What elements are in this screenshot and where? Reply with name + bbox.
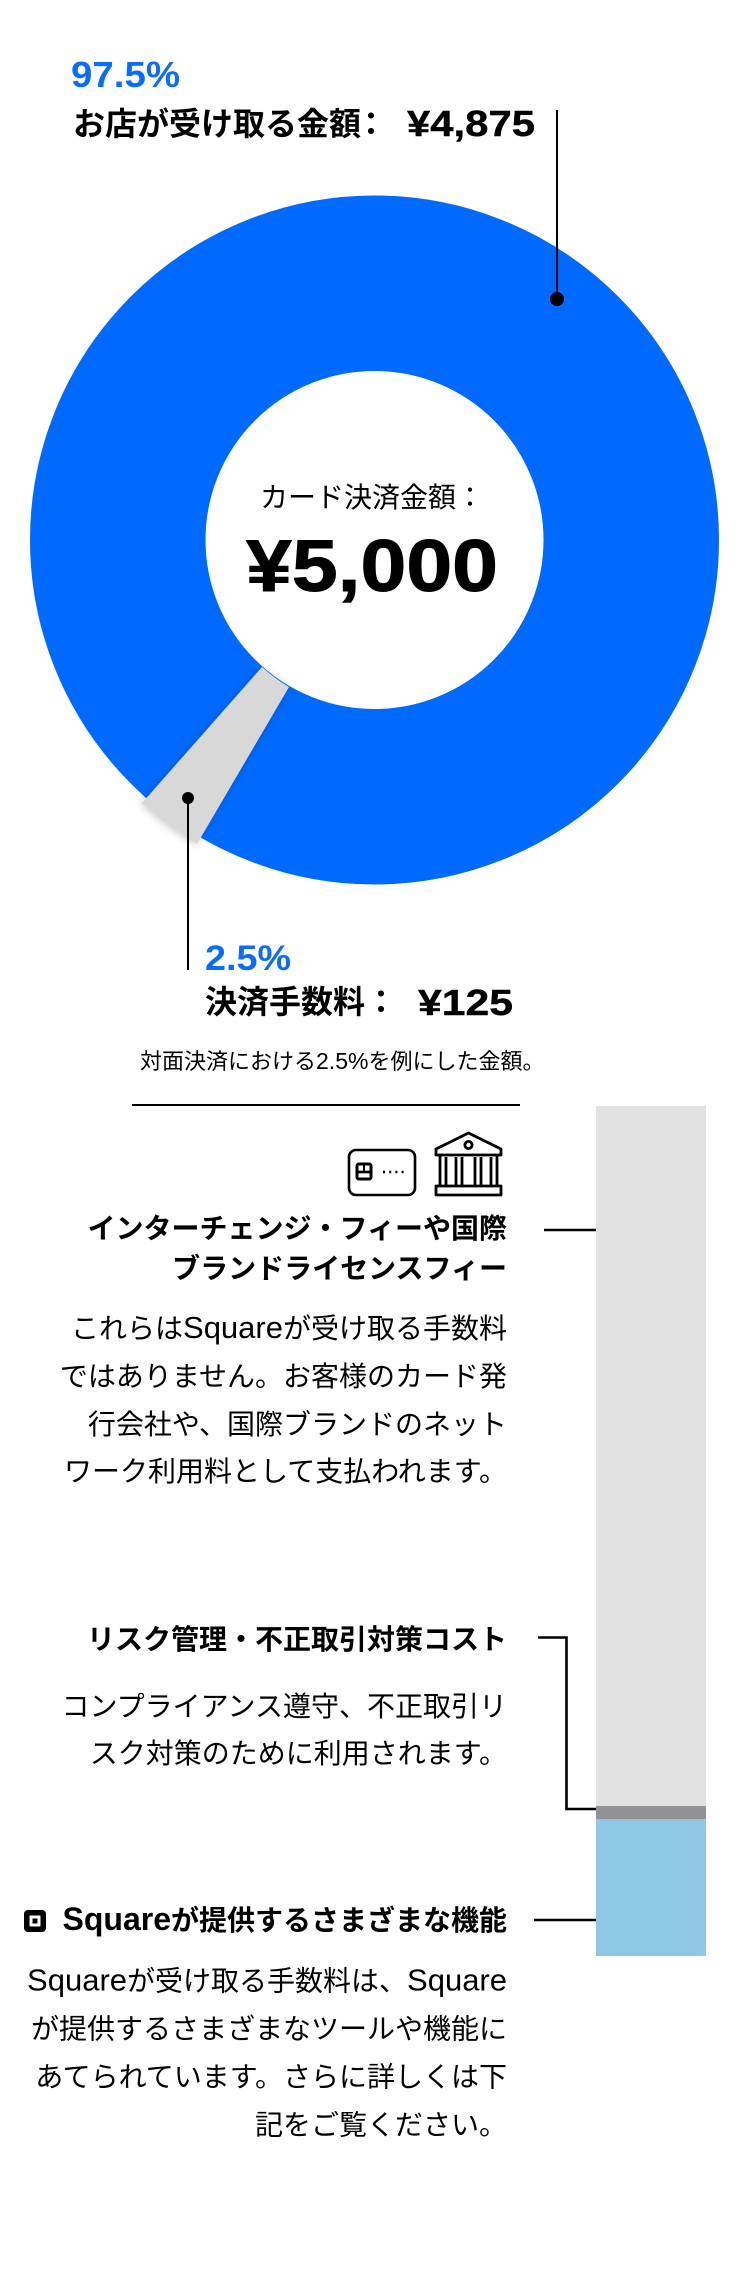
connector: risk bbox=[538, 1638, 596, 1809]
section: risk management: スク対策のために利用されます。 bbox=[90, 1738, 507, 1769]
leader line: fee bbox=[182, 792, 194, 970]
center total: カード決済金額： bbox=[260, 482, 484, 513]
label: fee amount: 決済手数料： bbox=[205, 984, 397, 1020]
donut chart bbox=[118, 283, 631, 844]
section: Square features: 記をご覧ください。 bbox=[255, 2110, 507, 2140]
section: risk management bbox=[62, 1624, 507, 1769]
section: interchange fee: ではありません。お客様のカード発 bbox=[60, 1361, 507, 1392]
section: interchange fee: インターチェンジ・フィーや国際 bbox=[88, 1213, 507, 1244]
section: risk management: コンプライアンス遵守、不正取引リ bbox=[62, 1691, 507, 1722]
section: interchange fee: 行会社や、国際ブランドのネット bbox=[88, 1409, 507, 1440]
label: merchant amount: お店が受け取る金額 bbox=[73, 106, 361, 142]
note: 対面決済における2.5%を例にした金額。 bbox=[140, 1048, 544, 1074]
section: interchange fee bbox=[60, 1213, 507, 1487]
section: interchange fee: これらはSquareが受け取る手数料 bbox=[71, 1310, 507, 1345]
label: merchant amount bbox=[71, 54, 535, 144]
icon: credit card bbox=[349, 1150, 415, 1195]
label: merchant amount: ： bbox=[355, 106, 387, 142]
section: Square features: が提供するさまざまなツールや機能に bbox=[31, 2014, 507, 2044]
center total: ¥5,000 bbox=[246, 526, 498, 607]
label: fee amount: 2.5% bbox=[205, 939, 291, 978]
label: fee amount bbox=[205, 939, 513, 1023]
label: merchant amount: 97.5% bbox=[71, 54, 180, 95]
stacked bar bbox=[596, 1106, 706, 1956]
section: risk management: リスク管理・不正取引対策コスト bbox=[87, 1624, 507, 1655]
section: Square features bbox=[27, 1901, 507, 2140]
section: interchange fee: ワーク利用料として支払われます。 bbox=[64, 1456, 507, 1487]
icon: bank bbox=[436, 1133, 501, 1195]
section: interchange fee: ブランドライセンスフィー bbox=[172, 1252, 507, 1284]
blue segment: 97.5% bbox=[118, 283, 631, 797]
section: Square features: Squareが受け取る手数料は、Square bbox=[27, 1962, 507, 1998]
label: fee amount: ¥125 bbox=[418, 982, 513, 1023]
center total bbox=[246, 482, 498, 607]
section: Square features: Squareが提供するさまざまな機能 bbox=[62, 1901, 507, 1937]
section: Square features: あてられています。さらに詳しくは下 bbox=[35, 2062, 507, 2092]
connector: Square bbox=[534, 1919, 596, 1921]
connector: interchange bbox=[544, 1229, 596, 1231]
leader line: merchant amount bbox=[550, 110, 564, 306]
gray segment: 2.5% bbox=[142, 667, 289, 844]
label: merchant amount: ¥4,875 bbox=[407, 103, 535, 144]
icon: Square logo bbox=[24, 1910, 46, 1932]
